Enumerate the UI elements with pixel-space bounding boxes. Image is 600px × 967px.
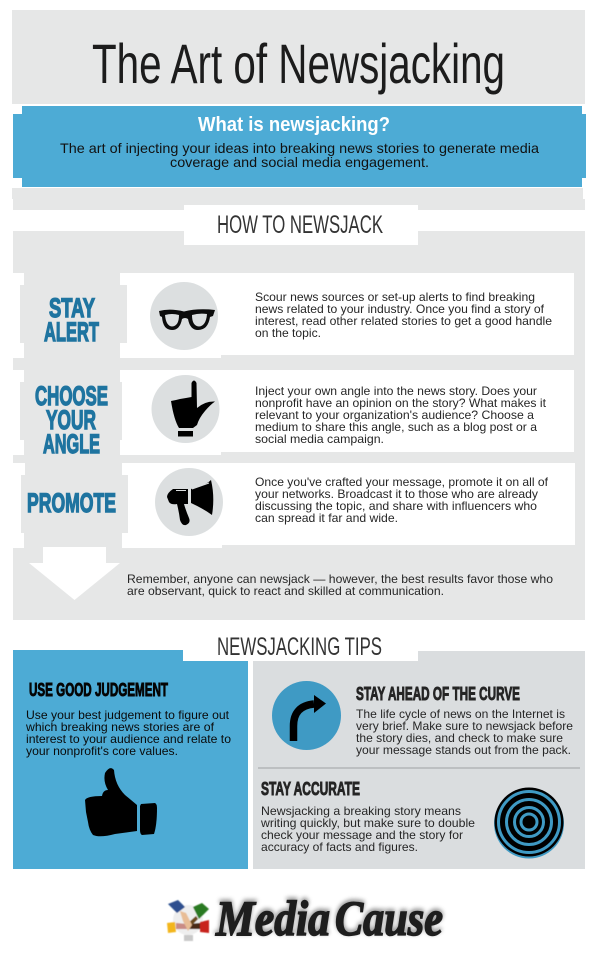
definition text: The art of injecting your ideas into breaking news stories to generate media — [60, 140, 539, 156]
step text: on the topic. — [255, 326, 321, 340]
tip text: your nonprofit's core values. — [26, 744, 178, 758]
panel: what is newsjacking — [13, 106, 586, 187]
heading: use good judgement: USE GOOD JUDGEMENT — [29, 680, 168, 700]
step 2: choose your angle — [13, 370, 574, 459]
tip text — [25, 708, 231, 758]
step text: Scour news sources or set-up alerts to find breaking — [255, 290, 535, 304]
step text: Once you've crafted your message, promote it on all of — [255, 475, 549, 489]
step label — [35, 381, 108, 459]
tip text: Newsjacking a breaking story means — [261, 804, 461, 818]
step label: STAY — [49, 293, 95, 323]
step text: social media campaign. — [255, 432, 384, 446]
panel: how to newsjack background — [12, 188, 585, 620]
logo wordmark: Cause — [335, 888, 443, 944]
step text: medium to share this angle, such as a blog post or a — [255, 420, 537, 434]
step text: Inject your own angle into the news story. Does your — [255, 384, 537, 398]
tip text: accuracy of facts and figures. — [261, 840, 418, 854]
step label: ALERT — [44, 317, 99, 347]
logo wordmark: Media — [215, 890, 330, 946]
logo wordmark — [215, 888, 443, 946]
closing text — [127, 572, 553, 598]
arrow: down — [29, 547, 120, 600]
step text: can spread it far and wide. — [255, 511, 398, 525]
step text — [255, 290, 552, 340]
tip text: check your message and the story for — [261, 828, 463, 842]
tip text — [260, 804, 475, 854]
tip text: The life cycle of news on the Internet is — [356, 707, 565, 721]
icon: megaphone — [155, 468, 223, 536]
tip text: which breaking news stories are of — [25, 720, 215, 734]
step text: interest, read other related stories to get a good handle — [255, 314, 552, 328]
closing text: Remember, anyone can newsjack — however, the best results favor those who — [127, 572, 553, 586]
closing text: are observant, quick to react and skilled at communication. — [127, 584, 444, 598]
panel: right tips — [253, 651, 585, 869]
step label: ANGLE — [43, 429, 100, 459]
step label: YOUR — [46, 405, 96, 435]
tip text — [356, 707, 573, 757]
step text: your networks. Broadcast it to those who are already — [255, 487, 538, 501]
definition text: coverage and social media engagement. — [170, 154, 429, 170]
title panel — [12, 10, 585, 104]
step label: PROMOTE — [27, 488, 116, 518]
tip text: Use your best judgement to figure out — [26, 708, 230, 722]
section heading box: how to newsjack — [184, 205, 418, 245]
heading: what is newsjacking: What is newsjacking? — [198, 114, 390, 136]
icon: target — [494, 788, 564, 858]
step text: news related to your industry. Once you find a story of — [255, 302, 545, 316]
icon: thumbs up — [85, 768, 157, 836]
step 1: stay alert — [13, 273, 574, 358]
step 3: promote — [13, 463, 575, 548]
logo: media cause — [167, 888, 443, 946]
step text: nonprofit have an opinion on the story? What makes it — [255, 396, 547, 410]
step label: CHOOSE — [35, 381, 108, 411]
step text: discussing the topic, and share with influencers who — [255, 499, 537, 513]
step label — [44, 293, 99, 347]
icon: turn arrow — [272, 681, 341, 750]
panel: use good judgement — [13, 650, 248, 869]
section heading: how to newsjack: HOW TO NEWSJACK — [217, 211, 383, 239]
section heading: newsjacking tips: NEWSJACKING TIPS — [217, 633, 382, 661]
step text — [255, 475, 549, 525]
icon: pointing hand — [152, 375, 220, 443]
tip text: interest to your audience and relate to — [26, 732, 231, 746]
step text — [255, 384, 547, 446]
tip text: the story dies, and check to make sure — [356, 731, 563, 745]
logo wordmark: Cause — [335, 890, 443, 946]
definition text — [60, 140, 539, 170]
logo wordmark: Media — [215, 888, 330, 944]
icon: hands — [167, 900, 209, 941]
icon: glasses — [150, 282, 218, 350]
tip text: very brief. Make sure to newsjack before — [356, 719, 573, 733]
tip text: your message stands out from the pack. — [356, 743, 571, 757]
tip text: writing quickly, but make sure to double — [260, 816, 475, 830]
step text: relevant to your organization's audience? Choose a — [255, 408, 534, 422]
heading: stay accurate: STAY ACCURATE — [261, 779, 360, 799]
